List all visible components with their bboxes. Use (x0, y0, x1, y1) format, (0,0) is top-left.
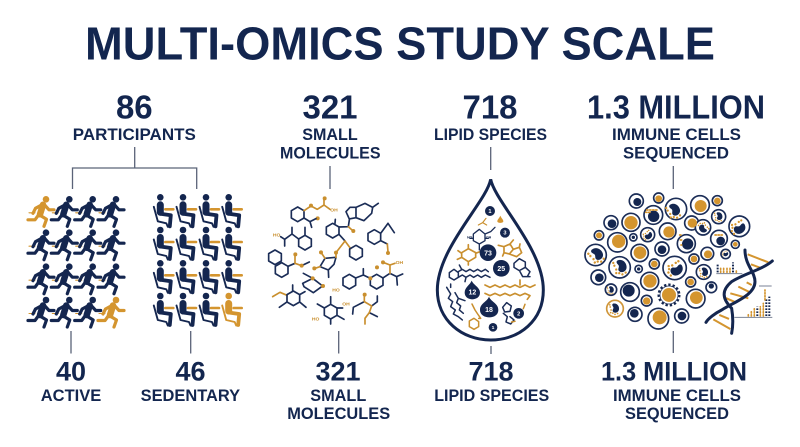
small molecules heading (280, 88, 381, 163)
lipid droplet: 18 (485, 307, 493, 314)
icons: active runners (28, 196, 124, 327)
small sequencing bar charts (716, 262, 772, 317)
small molecules heading: 321 (302, 88, 358, 125)
lipid droplet: 3 (503, 231, 507, 237)
molecule cluster: OH (330, 208, 338, 214)
panel: lipid species (434, 88, 549, 405)
lipid species heading: 718 (462, 88, 518, 125)
lipid species count: LIPID SPECIES (434, 387, 549, 405)
small molecules count: 321 (315, 357, 361, 387)
lipid droplet: 2 (517, 311, 520, 317)
lipid droplet: 73 (484, 250, 492, 257)
lipid species heading (434, 88, 547, 144)
spiky activated cell (659, 285, 679, 305)
panel: participants (28, 88, 242, 405)
active count (41, 357, 101, 405)
participants total heading: PARTICIPANTS (73, 126, 196, 144)
molecule cluster: HO (273, 232, 281, 238)
molecule cluster: OH (342, 301, 350, 307)
molecule cluster: OH (396, 260, 403, 266)
lipid droplet: HO (467, 236, 473, 240)
immune cells heading: IMMUNE CELLS (612, 126, 741, 144)
sedentary count: 46 (175, 357, 206, 387)
small molecules count: MOLECULES (287, 405, 390, 423)
lipid droplet: 25 (497, 266, 505, 273)
panel: immune cells (585, 88, 772, 423)
title: MULTI-OMICS STUDY SCALE (85, 18, 715, 70)
lipid droplet: 1 (488, 209, 492, 215)
immune cells count: SEQUENCED (625, 405, 729, 423)
molecule cluster (269, 196, 403, 324)
immune cells heading: SEQUENCED (623, 145, 729, 163)
bracket connector (72, 147, 197, 189)
immune cells count: 1.3 MILLION (601, 357, 747, 387)
panel: small molecules (269, 88, 403, 423)
active count: ACTIVE (41, 387, 101, 405)
sedentary count: SEDENTARY (141, 387, 240, 405)
small molecules heading: SMALL (302, 126, 358, 144)
sedentary count (141, 357, 240, 405)
immune cells heading: 1.3 MILLION (587, 88, 765, 125)
DNA helix (706, 250, 772, 333)
lipid droplet: 12 (468, 290, 476, 297)
molecule cluster: HO (332, 287, 340, 293)
lipid species count: 718 (468, 357, 514, 387)
participants total heading (73, 88, 196, 144)
lipid species count (434, 357, 549, 405)
lipid species heading: LIPID SPECIES (434, 126, 547, 144)
small molecules heading: MOLECULES (280, 145, 381, 163)
immune cell cluster (585, 193, 772, 333)
lipid droplet (437, 179, 543, 340)
immune cells count: IMMUNE CELLS (613, 387, 741, 405)
immune cells heading (587, 88, 765, 163)
immune cells count (601, 357, 747, 423)
lipid droplet: 1 (492, 325, 495, 331)
molecule cluster: HO (312, 317, 320, 323)
small molecules count: SMALL (310, 387, 366, 405)
active count: 40 (56, 357, 86, 387)
lipid droplet: OH (486, 236, 492, 240)
small molecules count (287, 357, 390, 423)
icons: sedentary seated people (154, 194, 242, 326)
participants total heading: 86 (116, 88, 153, 125)
